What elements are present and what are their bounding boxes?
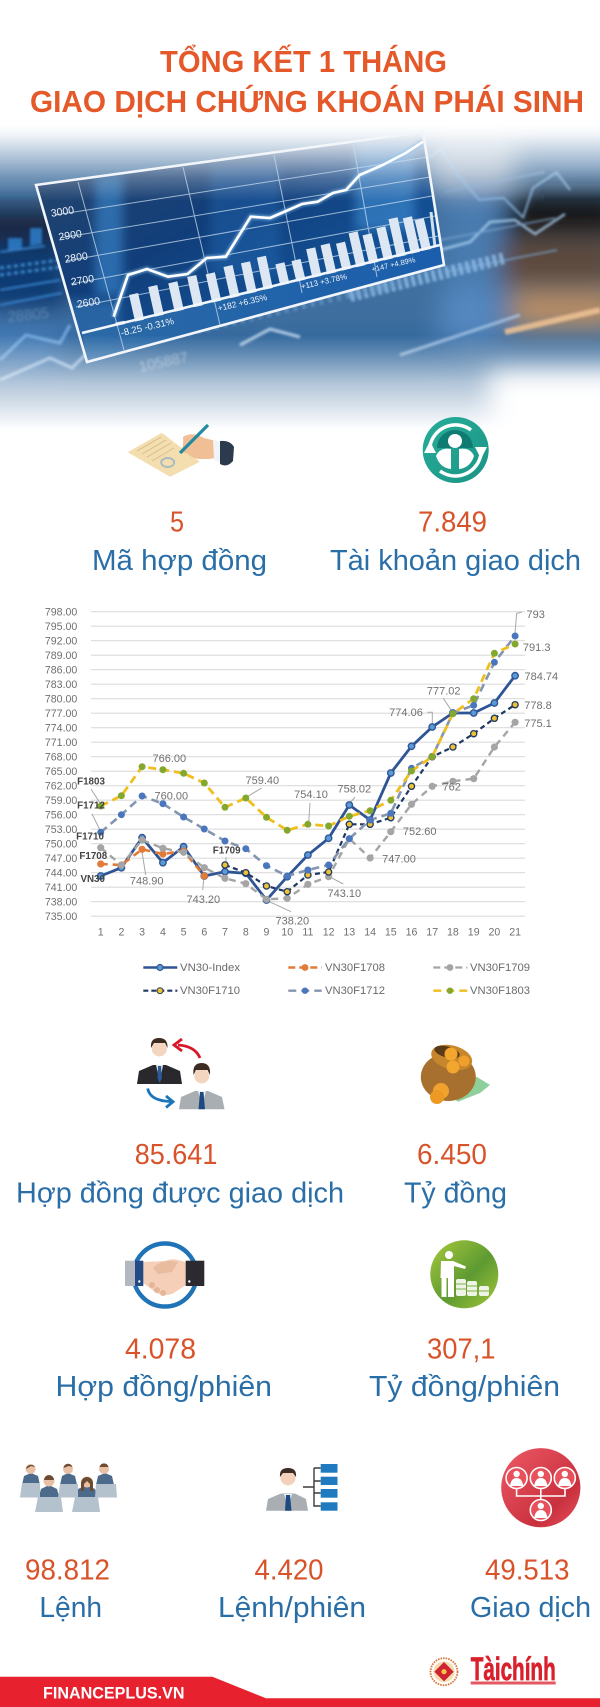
- value: 49.513: [485, 1554, 570, 1586]
- data labels: 791.3: [523, 642, 550, 654]
- y axis labels: 786.00: [45, 664, 77, 676]
- stat: orders: [20, 1463, 117, 1624]
- series name labels: [76, 776, 241, 885]
- data labels: 775.1: [524, 718, 552, 730]
- panel axis labels: 2900: [58, 228, 83, 243]
- panel axis labels: 2700: [70, 273, 95, 288]
- y axis labels: 735.00: [45, 911, 77, 923]
- y axis labels: 738.00: [45, 896, 77, 908]
- label: Tỷ đồng: [404, 1178, 507, 1210]
- data labels: 759.40: [245, 775, 279, 787]
- y axis labels: 753.00: [45, 824, 77, 836]
- x axis labels: 11: [302, 926, 314, 938]
- series: VN30F1709: [101, 722, 515, 899]
- legend: VN30F1803: [470, 985, 530, 997]
- x axis labels: 21: [509, 926, 521, 938]
- value: 4.420: [254, 1554, 324, 1586]
- value: 98.812: [25, 1554, 110, 1586]
- hero image: stock chart: [0, 125, 600, 462]
- label: Mã hợp đồng: [92, 545, 267, 577]
- title: GIAO DỊCH CHỨNG KHOÁN PHÁI SINH: [30, 83, 584, 119]
- icon: man with coin stacks: [430, 1240, 498, 1308]
- y axis labels: [45, 606, 77, 923]
- x axis labels: 9: [264, 926, 270, 938]
- logo: Tài chính: [430, 1651, 556, 1687]
- panel axis labels: -8.25 -0.31%: [120, 316, 176, 339]
- icon: call centre team: [20, 1463, 117, 1512]
- y axis labels: 777.00: [45, 708, 77, 720]
- panel axis labels: 2600: [76, 295, 101, 311]
- panel axis labels: +182 +6.35%: [217, 292, 269, 313]
- y axis labels: 789.00: [45, 650, 77, 662]
- data labels: [130, 609, 558, 928]
- grid lines: [91, 612, 525, 916]
- data labels: 748.90: [130, 876, 164, 888]
- y axis labels: 795.00: [45, 621, 77, 633]
- y axis labels: 774.00: [45, 722, 77, 734]
- background charts: 28805: [7, 305, 50, 326]
- x axis labels: 7: [222, 926, 228, 938]
- panel axis labels: [50, 204, 417, 339]
- series: VN30F1710: [225, 705, 515, 892]
- legend: [143, 962, 530, 997]
- fades: [0, 125, 600, 201]
- footer band: [0, 1677, 600, 1707]
- stat: trading accounts: [330, 417, 581, 577]
- x axis labels: 5: [181, 926, 187, 938]
- value: 5: [170, 507, 184, 539]
- x axis labels: 6: [201, 926, 207, 938]
- panel axis labels: +113 +3.78%: [300, 272, 348, 291]
- series name labels: VN30: [80, 874, 106, 885]
- y axis labels: 744.00: [45, 868, 77, 880]
- label: Tỷ đồng/phiên: [369, 1371, 560, 1403]
- background charts: [0, 147, 600, 380]
- y axis labels: 765.00: [45, 766, 77, 778]
- label: Tài khoản giao dịch: [330, 545, 581, 577]
- x axis labels: 10: [281, 926, 293, 938]
- data labels: 752.60: [403, 826, 437, 838]
- icon: money bag: [421, 1040, 490, 1104]
- x axis labels: 15: [385, 926, 397, 938]
- legend: VN30-Index: [180, 962, 241, 974]
- series: VN30-Index: [101, 676, 515, 900]
- y axis labels: 792.00: [45, 636, 77, 648]
- y axis labels: 762.00: [45, 780, 77, 792]
- label: Lệnh/phiên: [218, 1592, 366, 1624]
- x axis labels: 2: [118, 926, 124, 938]
- data labels: 738.20: [275, 916, 309, 928]
- footer text: FINANCEPLUS.VN: [43, 1683, 184, 1702]
- series: VN30F1803: [101, 644, 515, 830]
- x axis labels: [98, 926, 521, 938]
- stat: contracts: [92, 425, 267, 577]
- data labels: 784.74: [524, 671, 558, 683]
- y axis labels: 747.00: [45, 853, 77, 865]
- panel axis labels: +147 +4.89%: [371, 255, 417, 274]
- stat: trades: [470, 1448, 591, 1624]
- y axis labels: 768.00: [45, 752, 77, 764]
- icon: two businessmen exchanging: [137, 1038, 224, 1109]
- series: VN30F1712: [101, 636, 515, 876]
- x axis labels: 14: [364, 926, 376, 938]
- data labels: 754.10: [294, 789, 328, 801]
- panel axis labels: 3000: [50, 204, 75, 220]
- y axis labels: 780.00: [45, 694, 77, 706]
- data labels: 758.02: [337, 784, 371, 796]
- legend: VN30F1709: [470, 962, 530, 974]
- series name labels: F1712: [77, 801, 105, 812]
- x axis labels: 17: [426, 926, 438, 938]
- white trend line: [114, 142, 423, 317]
- leader lines: [91, 612, 522, 912]
- panel axis labels: 2800: [64, 250, 89, 266]
- x axis labels: 18: [447, 926, 459, 938]
- label: Giao dịch: [470, 1592, 591, 1624]
- x axis labels: 1: [98, 926, 104, 938]
- data labels: 760.00: [154, 790, 188, 802]
- icon: signing contract: [128, 425, 234, 477]
- data labels: 747.00: [382, 854, 416, 866]
- data labels: 793: [527, 609, 545, 621]
- stat: orders per session: [218, 1464, 366, 1624]
- icon: account cycle: [423, 417, 489, 483]
- value: 307,1: [427, 1334, 496, 1366]
- data labels: 762: [443, 782, 461, 794]
- y axis labels: 741.00: [45, 882, 77, 894]
- series name labels: F1708: [79, 851, 108, 862]
- series: VN30F1708: [101, 849, 204, 876]
- label: Hợp đồng/phiên: [56, 1371, 272, 1403]
- icon: handshake: [125, 1244, 204, 1306]
- y axis labels: 759.00: [45, 795, 77, 807]
- data labels: 743.20: [186, 894, 220, 906]
- data labels: 743.10: [327, 888, 361, 900]
- series name labels: F1709: [213, 846, 241, 857]
- legend: VN30F1712: [325, 985, 385, 997]
- panel lines: [55, 143, 438, 350]
- stat: billion VND per session: [369, 1240, 560, 1403]
- value: 4.078: [125, 1334, 196, 1366]
- stat: billion VND: [404, 1040, 507, 1210]
- label: Hợp đồng được giao dịch: [16, 1178, 344, 1210]
- y axis labels: 771.00: [45, 737, 77, 749]
- chart panel fill: [38, 143, 440, 350]
- icon: person with hierarchy: [266, 1464, 338, 1511]
- logo: Tài chính: Tàichính: [471, 1651, 556, 1687]
- x axis labels: 3: [139, 926, 145, 938]
- icon: people network: [501, 1448, 580, 1527]
- x axis labels: 13: [343, 926, 355, 938]
- value: 6.450: [417, 1139, 487, 1171]
- title: TỔNG KẾT 1 THÁNG: [160, 43, 447, 79]
- stat: contracts traded: [16, 1038, 344, 1210]
- y axis labels: 798.00: [45, 606, 77, 618]
- value: 85.641: [135, 1139, 217, 1171]
- title: [30, 43, 584, 119]
- bars: [120, 217, 427, 325]
- data labels: 778.8: [524, 700, 552, 712]
- y axis labels: 783.00: [45, 679, 77, 691]
- value: 7.849: [418, 507, 487, 539]
- data labels: 777.02: [427, 686, 461, 698]
- label: Lệnh: [39, 1592, 102, 1624]
- background charts: 105887: [137, 349, 190, 376]
- legend: VN30F1710: [180, 985, 240, 997]
- stat: contracts per session: [56, 1244, 272, 1403]
- y axis labels: 750.00: [45, 838, 77, 850]
- line chart: [45, 606, 558, 997]
- x axis labels: 19: [468, 926, 480, 938]
- x axis labels: 8: [243, 926, 249, 938]
- x axis labels: 16: [406, 926, 417, 938]
- series name labels: F1803: [77, 776, 105, 788]
- series name labels: F1710: [76, 832, 104, 843]
- x axis labels: 20: [489, 926, 500, 938]
- data labels: 766.00: [152, 753, 186, 765]
- panel frame: [36, 132, 444, 362]
- y axis labels: 756.00: [45, 810, 77, 822]
- legend: VN30F1708: [325, 962, 385, 974]
- x axis labels: 12: [323, 926, 335, 938]
- x axis labels: 4: [160, 926, 166, 938]
- data labels: 774.06: [389, 707, 423, 719]
